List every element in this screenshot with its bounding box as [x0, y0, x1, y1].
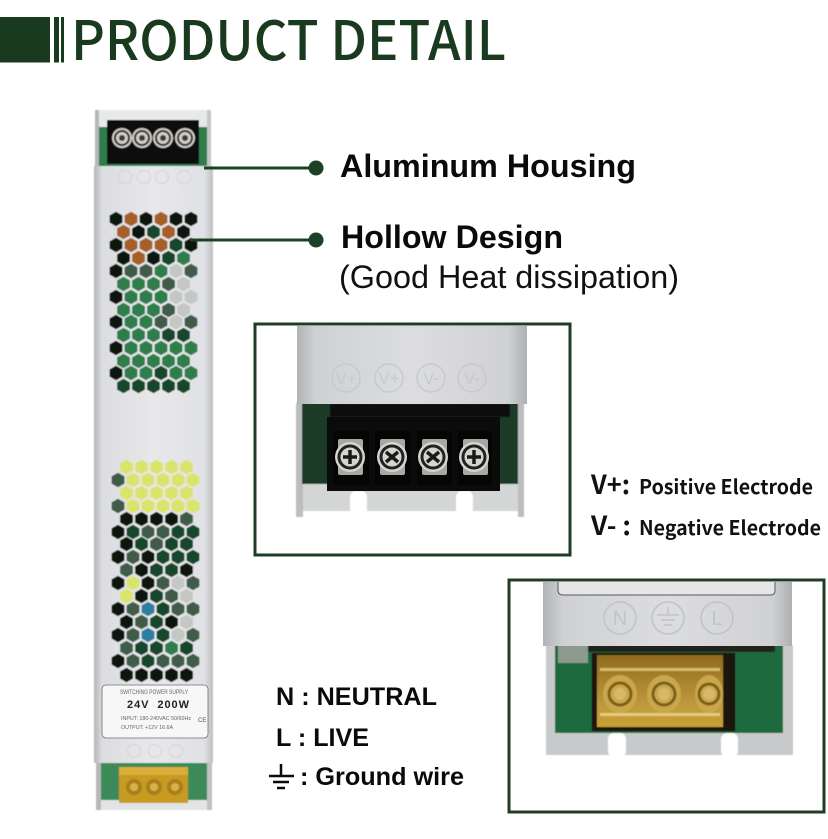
label: hollow design: (Good Heat dissipation) [339, 259, 679, 295]
bottom amber terminal [119, 767, 188, 803]
rating label: SWITCHING POWER SUPPLY [120, 690, 188, 696]
legend: V+ [590, 465, 813, 502]
legend: ground wire: : Ground wire [300, 763, 464, 791]
embossed V marks [118, 170, 190, 184]
bottom rails, PCB [96, 760, 212, 810]
lower vent holes [112, 460, 199, 682]
top rails and PCB [95, 110, 211, 168]
panel: DC output terminal close-up [255, 324, 570, 555]
frame [509, 580, 824, 812]
legend: V-: Negative Electrode [639, 512, 821, 541]
label: hollow design: Hollow Design [341, 219, 563, 255]
panel: AC input terminal close-up [509, 580, 824, 812]
silver cap: N [613, 608, 627, 630]
silver cap [543, 582, 792, 646]
silver cap: V- [464, 369, 480, 388]
connector: aluminum housing [204, 160, 324, 176]
rating label: INPUT: 180-240VAC 50/60Hz [121, 716, 191, 722]
legend: L: L : LIVE [276, 724, 369, 752]
rating label [102, 685, 208, 738]
legend: V+: V+: [590, 465, 630, 502]
black terminal block with screws [327, 417, 500, 491]
rating label: CE [198, 718, 206, 724]
rating label: 24V 200W [127, 699, 190, 711]
legend: V- [590, 506, 821, 543]
embossed N, ground, L marks [128, 744, 182, 758]
silver cap: V+ [378, 369, 400, 388]
title block icon [0, 17, 64, 62]
title [0, 0, 506, 76]
label: aluminum housing: Aluminum Housing [340, 148, 636, 184]
rating label: OUTPUT: +12V 16.6A [121, 725, 173, 731]
frame [255, 324, 570, 555]
upper vent holes [110, 212, 197, 393]
lower housing and PCB [546, 645, 793, 757]
silver cap: V- [423, 369, 439, 388]
label: hollow design [339, 219, 679, 295]
legend: V-: V- : [590, 506, 631, 543]
aluminum body [94, 166, 213, 763]
silver cap: V+ [335, 369, 357, 388]
legend: N: N : NEUTRAL [276, 683, 437, 711]
legend: V+: Positive Electrode [639, 471, 813, 500]
top terminal block [107, 120, 199, 164]
product photo: power supply [94, 110, 213, 810]
connector: hollow design [190, 232, 324, 248]
amber terminal block [592, 653, 735, 731]
silver cap [297, 326, 527, 404]
lower housing and PCB [296, 403, 524, 517]
icon: ground symbol [269, 764, 294, 788]
silver cap: L [711, 608, 723, 630]
